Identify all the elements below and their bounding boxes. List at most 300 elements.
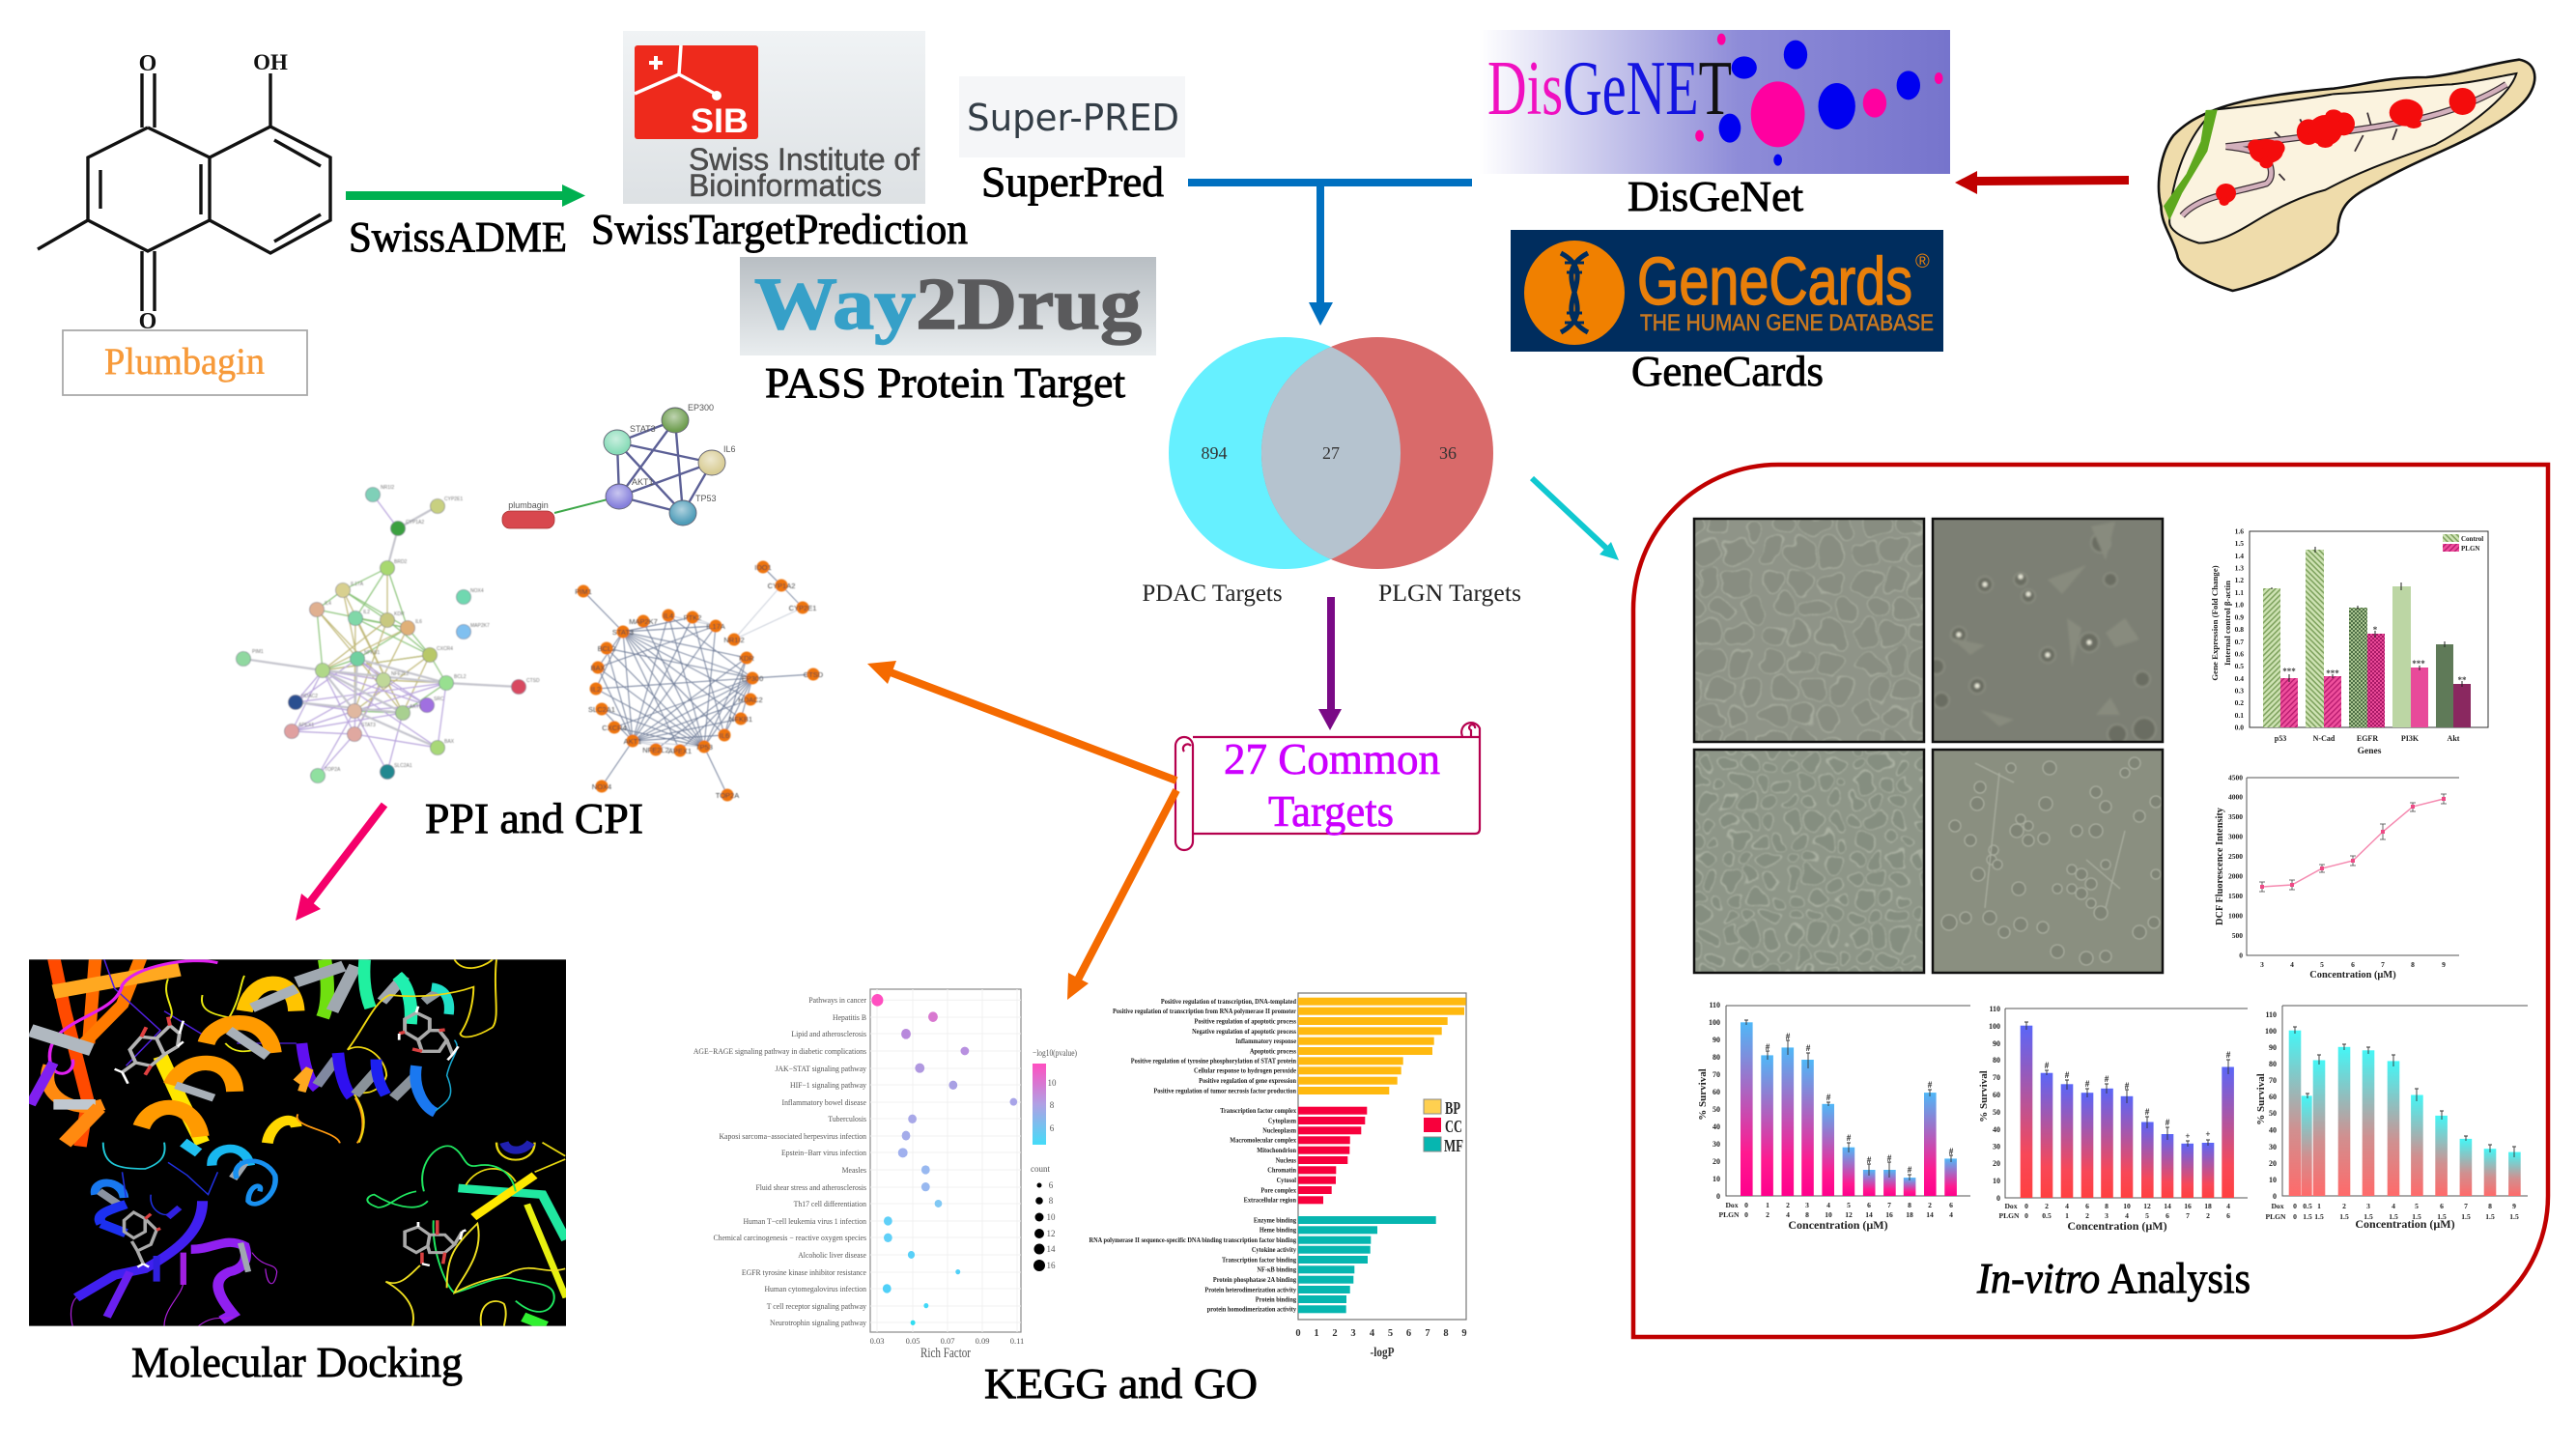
chart: survival 2: # [2105, 1074, 2109, 1084]
chart: survival 3: 50 [2269, 1109, 2277, 1118]
arrow: green to SwissTargetPrediction [346, 185, 585, 207]
chart: KEGG bubble plot: Th17 cell differentiation [794, 1200, 866, 1208]
network: protein-protein interaction (STRING): BCL2 [454, 674, 467, 680]
microscopy: cells control top-left [1692, 518, 1926, 744]
chart: gene expression bars: 0.9 [2235, 612, 2244, 622]
chart: GO enrichment bars: 0 [1295, 1328, 1301, 1339]
scroll: 27 common targets [1175, 723, 1480, 850]
chart: KEGG bubble plot: EGFR tyrosine kinase inhibitor resistance [742, 1268, 866, 1277]
chart: survival 1: 4 [1826, 1201, 1830, 1209]
arrow: orange to PPI [867, 661, 1176, 781]
chart: survival 2: + [2205, 1129, 2211, 1139]
chart: KEGG bubble plot: 8 [1050, 1100, 1055, 1110]
label: SwissTargetPrediction: SwissTargetPrediction [591, 206, 968, 253]
network: protein-protein interaction (STRING): KDR [394, 611, 405, 617]
network: protein-protein interaction (STRING): IL6 [415, 619, 422, 625]
chart: survival 3: 0.5 [2303, 1202, 2312, 1210]
chart: survival 2: 14 [2164, 1202, 2171, 1210]
network: circular PPI layout: NR1I2 [723, 636, 745, 644]
chart: GO enrichment bars: Chromatin [1267, 1167, 1296, 1175]
network: protein-protein interaction (STRING): MAP2K7 [470, 623, 490, 629]
chart: gene expression bars: ** [2457, 675, 2467, 685]
chart: survival 3: 4 [2392, 1202, 2395, 1210]
chart: survival 1: 8 [1908, 1201, 1911, 1209]
chart: KEGG bubble plot: Hepatitis B [833, 1013, 866, 1022]
chart: survival 3: 70 [2269, 1076, 2277, 1085]
chart: survival 3: 1.5 [2485, 1212, 2495, 1221]
scroll: 27 common targets: Targets [1268, 787, 1394, 836]
chart: survival 2: 110 [1989, 1005, 2000, 1013]
chart: KEGG bubble plot: JAK−STAT signaling pathway [775, 1065, 867, 1073]
network: circular PPI layout: IL6 [720, 731, 729, 740]
chart: survival 3: 1.5 [2461, 1212, 2471, 1221]
quadrant: docking pose 2 [297, 959, 496, 1143]
chart: survival 2 [1978, 1005, 2248, 1233]
chart: DCF fluorescence line: 2500 [2228, 852, 2243, 861]
chart: KEGG bubble plot: Rich Factor [920, 1346, 971, 1361]
chart: GO enrichment bars: Mitochondrion [1257, 1148, 1296, 1154]
chart: survival 1: 2 [1928, 1201, 1932, 1209]
chart: survival 1: 30 [1713, 1140, 1720, 1149]
chart: GO enrichment bars: Positive regulation of gene expression [1199, 1078, 1296, 1085]
chart: survival 3: 80 [2269, 1060, 2277, 1068]
chart: KEGG bubble plot: Neurotrophin signaling pathway [770, 1319, 867, 1327]
chart: survival 1: # [1908, 1165, 1912, 1175]
chart: gene expression bars: Akt [2448, 734, 2460, 743]
network: protein-protein interaction (STRING): CXCR4 [437, 646, 453, 652]
network: circular PPI layout: STAT3 [612, 628, 634, 637]
chart: survival 1: PLGN [1718, 1210, 1740, 1219]
chart: gene expression bars: *** [2412, 659, 2425, 668]
chart: gene expression bars: Internal control β-actin [2222, 581, 2232, 666]
chart: survival 2: % Survival [1978, 1070, 1990, 1122]
chart: survival 1: 14 [1926, 1210, 1934, 1219]
chart: KEGG bubble plot: Human cytomegalovirus infection [764, 1285, 866, 1293]
chart: DCF fluorescence line: 3 [2260, 960, 2264, 969]
chart: GO enrichment bars: Inflammatory response [1235, 1038, 1296, 1045]
network: protein-protein interaction (STRING): IL4 [325, 601, 331, 607]
chart: DCF fluorescence line [2215, 773, 2459, 980]
network: protein-protein interaction (STRING): BRD2 [394, 559, 408, 565]
chart: survival 3: 1.5 [2437, 1212, 2447, 1221]
chart: GO enrichment bars: Protein heterodimerization activity [1204, 1287, 1297, 1294]
panel: in-vitro analysis frame [1633, 465, 2548, 1337]
chart: survival 1: 4 [1949, 1210, 1953, 1219]
chart: GO enrichment bars: 2 [1332, 1328, 1338, 1339]
chart: DCF fluorescence line: 3500 [2228, 812, 2243, 821]
network: circular PPI layout: APEX1 [668, 747, 692, 755]
arrow: blue bracket to Venn [1188, 179, 1472, 326]
chart: survival 2: 4 [2226, 1202, 2230, 1210]
chart: KEGG bubble plot: 0.05 [906, 1336, 920, 1346]
chart: survival 3 [2255, 1006, 2528, 1231]
logo: GeneCards [1511, 230, 1943, 352]
network: circular PPI layout: NOX4 [592, 782, 611, 791]
chart: survival 2: 6 [2166, 1211, 2169, 1220]
chart: gene expression bars: *** [2326, 668, 2339, 678]
chart: gene expression bars [2210, 527, 2488, 756]
chart: gene expression bars: 0.0 [2235, 723, 2244, 732]
chart: survival 2: 6 [2226, 1211, 2230, 1220]
chart: survival 3: 30 [2269, 1143, 2277, 1151]
chart: gene expression bars: PLGN [2461, 545, 2479, 553]
chart: survival 3: 110 [2265, 1010, 2277, 1019]
network: circular PPI layout: TOP2A [716, 791, 739, 800]
network: circular PPI layout: IL4 [664, 611, 673, 620]
chart: survival 1: 18 [1906, 1210, 1913, 1219]
chart: DCF fluorescence line: 1000 [2228, 912, 2243, 920]
chart: gene expression bars: Control [2461, 535, 2483, 543]
chart: survival 3: 1.5 [2412, 1212, 2421, 1221]
logo: DisGeNET: DisGeNET [1487, 46, 1732, 131]
ligand: pose 3 [125, 1212, 160, 1267]
logo: SwissTargetPrediction: Swiss Institute of [689, 142, 920, 177]
chart: GO enrichment bars: -logP [1370, 1346, 1395, 1360]
quadrant: docking pose 4 [367, 1143, 566, 1326]
chart: gene expression bars: PI3K [2401, 734, 2420, 743]
chart: survival 3: 60 [2269, 1093, 2277, 1101]
chart: survival 3: 1.5 [2303, 1212, 2312, 1221]
arrow: orange to KEGG and GO [1067, 790, 1176, 1000]
chart: survival 2: 4 [2125, 1211, 2129, 1220]
chart: survival 3: 5 [2415, 1202, 2419, 1210]
venn diagram: PDAC vs PLGN targets: 894 [1202, 443, 1227, 463]
chart: survival 2: 0 [1996, 1194, 2000, 1203]
venn diagram: PDAC vs PLGN targets: PLGN Targets [1378, 581, 1521, 607]
logo: Super-PRED: Super-PRED [967, 97, 1179, 139]
chart: GO enrichment bars: MF [1444, 1136, 1463, 1155]
chart: GO enrichment bars: Cytokine activity [1252, 1247, 1297, 1254]
network: protein-protein interaction (STRING): IL2 [363, 610, 370, 615]
label: SuperPred: SuperPred [981, 158, 1164, 206]
chart: survival 3: 0 [2273, 1192, 2277, 1201]
chart: KEGG bubble plot: Pathways in cancer [808, 996, 866, 1005]
chart: GO enrichment bars: RNA polymerase II sequence-specific DNA binding transcription factor binding [1090, 1237, 1297, 1244]
chart: survival 3: 8 [2488, 1202, 2492, 1210]
chart: GO enrichment bars: 5 [1388, 1328, 1393, 1339]
network: circular PPI layout: IL2 [591, 685, 601, 694]
chart: DCF fluorescence line: DCF Fluorescence Intensity [2215, 807, 2225, 925]
chart: gene expression bars: EGFR [2357, 734, 2378, 743]
chart: GO enrichment bars: 3 [1350, 1328, 1356, 1339]
chart: survival 1: # [1928, 1080, 1933, 1090]
chart: gene expression bars: 0.8 [2235, 625, 2244, 634]
label: GeneCards: GeneCards [1631, 348, 1824, 395]
ligand: pose 1 [115, 1017, 184, 1084]
chart: survival 1: 5 [1847, 1201, 1851, 1209]
chart: survival 1: 100 [1709, 1018, 1720, 1027]
chart: GO enrichment bars: NF-κB binding [1257, 1266, 1297, 1274]
chart: survival 1: 12 [1845, 1210, 1853, 1219]
chart: survival 2: 12 [2143, 1202, 2151, 1210]
chart: GO enrichment bars: Nucleus [1276, 1157, 1296, 1165]
chart: survival 2: 100 [1989, 1022, 2000, 1031]
chart: survival 1: 1 [1766, 1201, 1769, 1209]
chart: KEGG bubble plot: Kaposi sarcoma−associated herpesvirus infection [719, 1132, 866, 1141]
chart: survival 2: # [2085, 1079, 2090, 1089]
chart: GO enrichment bars: Macromolecular complex [1230, 1137, 1297, 1145]
chart: survival 2: Dox [2004, 1202, 2018, 1210]
quadrant: docking pose 3 [71, 1143, 277, 1326]
chart: survival 2: 10 [2123, 1202, 2131, 1210]
icon: pancreas with tumours [2159, 60, 2534, 291]
chart: gene expression bars: 0.5 [2235, 662, 2244, 670]
chart: GO enrichment bars: 8 [1443, 1328, 1449, 1339]
plumbagin chemical structure: O [139, 309, 156, 334]
label: PASS Protein Target: PASS Protein Target [765, 359, 1125, 407]
network: circular PPI layout: SLC2A1 [588, 705, 615, 714]
chart: survival 2: 3 [2105, 1211, 2109, 1220]
network: compound-protein interaction [502, 403, 736, 528]
logo: SwissTargetPrediction [623, 31, 925, 204]
chart: GO enrichment bars: Enzyme binding [1254, 1217, 1297, 1225]
chart: survival 2: 8 [2105, 1202, 2109, 1210]
chart: gene expression bars: 1.2 [2235, 576, 2244, 584]
chart: survival 3: 1.5 [2509, 1212, 2519, 1221]
chart: survival 1: 8 [1805, 1210, 1809, 1219]
chart: GO enrichment bars: 4 [1370, 1328, 1375, 1339]
venn diagram: PDAC vs PLGN targets: 36 [1439, 443, 1457, 463]
network: protein-protein interaction (STRING): BAX [444, 739, 455, 745]
chart: survival 2: 1 [2065, 1211, 2069, 1220]
chart: KEGG bubble plot: 0.07 [941, 1336, 954, 1346]
chart: KEGG bubble plot [694, 989, 1077, 1361]
arrow: red from pancreas [1955, 171, 2129, 194]
label: In-vitro Analysis: In-vitro Analysis [1976, 1255, 2250, 1302]
chart: survival 1: 110 [1709, 1001, 1720, 1009]
chart: gene expression bars: 0.6 [2235, 649, 2244, 659]
network: circular PPI layout: CTSD [804, 670, 824, 679]
chart: survival 3: 1.5 [2339, 1212, 2349, 1221]
chart: survival 1: 10 [1825, 1210, 1832, 1219]
chart: survival 1: 2 [1766, 1210, 1769, 1219]
chart: survival 1: # [1826, 1093, 1831, 1102]
chart: survival 1: # [1786, 1032, 1791, 1041]
chart: survival 2: 5 [2145, 1211, 2149, 1220]
chart: DCF fluorescence line: 2000 [2228, 871, 2243, 881]
chart: DCF fluorescence line: 5 [2320, 960, 2324, 969]
chart: GO enrichment bars: Positive regulation of transcription from RNA polymerase II promoter [1113, 1009, 1296, 1015]
chart: DCF fluorescence line: 8 [2411, 960, 2415, 969]
chart: DCF fluorescence line: 1500 [2228, 892, 2243, 900]
chart: survival 1: % Survival [1697, 1068, 1709, 1121]
chart: GO enrichment bars: 9 [1461, 1328, 1467, 1339]
venn diagram: PDAC vs PLGN targets [1142, 337, 1521, 607]
microscopy: cells treated top-right [1929, 519, 2163, 744]
arrow: purple to common targets [1318, 597, 1342, 730]
microscopy: cells control bottom-left [1692, 748, 1926, 974]
chart: survival 3: 7 [2464, 1202, 2468, 1210]
chart: gene expression bars: 1.6 [2235, 527, 2244, 535]
logo: Way2Drug: Way 2Drug [754, 264, 1142, 345]
chart: survival 2: 40 [1993, 1125, 2000, 1134]
chart: survival 2: # [2145, 1107, 2150, 1117]
chart: survival 2: 0 [2024, 1202, 2028, 1210]
chart: survival 3: 6 [2440, 1202, 2444, 1210]
chart: KEGG bubble plot: 12 [1047, 1229, 1055, 1238]
chart: GO enrichment bars: CC [1445, 1117, 1462, 1136]
chart: KEGG bubble plot: 0.03 [870, 1336, 884, 1346]
network: circular PPI layout: PIM1 [575, 587, 592, 596]
network: compound-protein interaction: AKT1 [632, 477, 654, 487]
chart: KEGG bubble plot: 6 [1049, 1180, 1054, 1190]
chart: survival 2: 2 [2206, 1211, 2210, 1220]
network: circular PPI layout: PTK2 [684, 613, 701, 622]
chart: survival 1: # [1806, 1043, 1811, 1053]
network: circular PPI layout: NFE2L2 [642, 746, 669, 754]
microscopy: cells treated bottom-right [1933, 750, 2163, 973]
chart: KEGG bubble plot: Alcoholic liver disease [798, 1251, 866, 1260]
chart: survival 2: 2 [2085, 1211, 2089, 1220]
chart: survival 1: 4 [1786, 1210, 1790, 1219]
network: circular PPI layout: MAP2K7 [629, 617, 658, 626]
chart: survival 2: # [2065, 1070, 2070, 1080]
chart: survival 3: 1 [2317, 1202, 2321, 1210]
chart: GO enrichment bars: Heme binding [1260, 1227, 1297, 1235]
chart: survival 3: 0 [2293, 1202, 2297, 1210]
chart: KEGG bubble plot: Tuberculosis [828, 1115, 866, 1123]
chart: survival 2: 0 [2024, 1211, 2028, 1220]
network: protein-protein interaction (STRING): PIM1 [252, 649, 264, 655]
chart: KEGG bubble plot: 8 [1049, 1196, 1054, 1206]
chart: DCF fluorescence line: 9 [2442, 960, 2446, 969]
chart: GO enrichment bars: BP [1445, 1098, 1460, 1118]
chart: GO enrichment bars: Pore complex [1260, 1187, 1297, 1195]
network: circular PPI layout: CYP1A2 [768, 582, 795, 590]
chart: survival 1: 0 [1716, 1192, 1720, 1201]
chart: GO enrichment bars: Protein binding [1256, 1296, 1297, 1304]
chart: KEGG bubble plot: Chemical carcinogenesis − reactive oxygen species [713, 1234, 866, 1242]
label: DisGeNet: DisGeNet [1628, 173, 1803, 220]
chart: GO enrichment bars: Positive regulation of transcription, DNA-templated [1161, 999, 1296, 1006]
chart: survival 1: 6 [1949, 1201, 1953, 1209]
chart: GO enrichment bars: 7 [1425, 1328, 1430, 1339]
network: circular PPI layout: HDAC2 [738, 696, 763, 704]
chart: gene expression bars: 0.1 [2235, 711, 2244, 720]
network: protein-protein interaction (STRING): SRC [434, 696, 444, 702]
chart: survival 1: 6 [1867, 1201, 1871, 1209]
chart: gene expression bars: 1.5 [2235, 539, 2244, 548]
chart: survival 1: 10 [1713, 1175, 1720, 1183]
chart: GO enrichment bars [1090, 993, 1467, 1360]
chart: survival 2: 7 [2186, 1211, 2190, 1220]
network: compound-protein interaction: STAT3 [630, 424, 656, 434]
network: circular PPI layout: EP300 [742, 674, 763, 683]
network: protein-protein interaction (STRING) [236, 485, 540, 782]
logo: GeneCards: THE HUMAN GENE DATABASE [1640, 310, 1934, 336]
chart: gene expression bars: Gene Expression (Fold Change) [2210, 565, 2220, 681]
chart: DCF fluorescence line: 500 [2232, 931, 2243, 940]
chart: survival 3: % Survival [2255, 1073, 2267, 1125]
chart: survival 1: # [1766, 1042, 1770, 1052]
label: PPI and CPI: PPI and CPI [425, 795, 643, 842]
chart: DCF fluorescence line: 4500 [2228, 773, 2243, 782]
logo: SwissTargetPrediction: Bioinformatics [689, 168, 882, 203]
chart: gene expression bars: Genes [2358, 747, 2382, 756]
chart: KEGG bubble plot: Human T−cell leukemia virus 1 infection [743, 1217, 866, 1226]
network: circular PPI layout: CXCR4 [602, 724, 627, 732]
chart: KEGG bubble plot: 14 [1047, 1244, 1056, 1254]
label: SwissADME: SwissADME [349, 213, 567, 261]
plumbagin label box: Plumbagin [104, 341, 265, 383]
network: circular PPI layout: IDO1 [754, 563, 772, 572]
chart: survival 1: 50 [1713, 1105, 1720, 1114]
network: protein-protein interaction (STRING): SLC2A1 [394, 763, 412, 769]
chart: survival 1: # [1847, 1133, 1852, 1143]
chart: KEGG bubble plot: 10 [1047, 1078, 1057, 1088]
network: protein-protein interaction (STRING): NOX4 [470, 588, 484, 594]
chart: survival 3: 9 [2512, 1202, 2516, 1210]
chart: survival 2: 50 [1993, 1108, 2000, 1117]
chart: survival 2: # [2045, 1061, 2050, 1070]
network: circular PPI layout: TP53 [695, 743, 713, 752]
plumbagin chemical structure: O [139, 51, 156, 76]
chart: survival 1: 70 [1713, 1070, 1720, 1079]
chart: KEGG bubble plot: 6 [1050, 1123, 1055, 1133]
network: protein-protein interaction (STRING): IL17A [351, 582, 364, 587]
logo: DisGeNET [1479, 30, 1950, 174]
chart: gene expression bars: 1.3 [2235, 564, 2244, 572]
network: compound-protein interaction: EP300 [688, 403, 714, 412]
chart: gene expression bars: 0.2 [2235, 698, 2244, 707]
chart: survival 2: 6 [2085, 1202, 2089, 1210]
chart: survival 2: 90 [1993, 1039, 2000, 1048]
chart: survival 3: 40 [2269, 1126, 2277, 1134]
chart: gene expression bars: 1.4 [2235, 552, 2244, 560]
chart: survival 2: # [2226, 1050, 2231, 1060]
arrow: teal to in-vitro panel [1532, 478, 1619, 560]
network: protein-protein interaction (STRING): STAT3 [361, 723, 376, 728]
chart: survival 1: 80 [1713, 1053, 1720, 1062]
network: protein-protein interaction (STRING): CYP2E1 [444, 497, 463, 502]
chart: survival 1: 90 [1713, 1036, 1720, 1044]
chart: survival 1: 3 [1805, 1201, 1809, 1209]
venn diagram: PDAC vs PLGN targets: PDAC Targets [1142, 581, 1283, 607]
network: protein-protein interaction (STRING): APEX1 [298, 723, 314, 728]
chart: gene expression bars: * [2373, 625, 2378, 635]
chart: survival 3: 0 [2293, 1212, 2297, 1221]
chart: survival 2: # [2166, 1118, 2170, 1127]
image: molecular docking [29, 956, 566, 1326]
network: protein-protein interaction (STRING): NFE2L2 [391, 671, 410, 677]
quadrant: docking pose 1 [31, 956, 362, 1147]
chart: KEGG bubble plot: T cell receptor signaling pathway [767, 1302, 867, 1311]
chart: DCF fluorescence line: 4000 [2228, 792, 2243, 802]
chart: GO enrichment bars: Protein phosphatase 2A binding [1213, 1277, 1297, 1284]
chart: gene expression bars: 1.0 [2235, 601, 2244, 609]
chart: GO enrichment bars: Apoptotic process [1250, 1048, 1296, 1056]
chart: GO enrichment bars: Positive regulation of apoptotic process [1195, 1018, 1296, 1026]
chart: survival 1: 7 [1887, 1201, 1891, 1209]
chart: KEGG bubble plot: −log10(pvalue) [1033, 1048, 1077, 1059]
network: circular PPI layout: BCL2 [598, 644, 615, 653]
chart: survival 1: 20 [1713, 1157, 1720, 1166]
chart: DCF fluorescence line: 0 [2239, 951, 2243, 960]
chart: gene expression bars: 1.1 [2235, 588, 2244, 597]
chart: gene expression bars: *** [2282, 667, 2296, 676]
chart: KEGG bubble plot: Epstein−Barr virus infection [781, 1149, 866, 1157]
chart: GO enrichment bars: Positive regulation of tumor necrosis factor production [1153, 1088, 1296, 1095]
chart: GO enrichment bars: Transcription factor binding [1222, 1257, 1297, 1264]
chart: DCF fluorescence line: 3000 [2228, 833, 2243, 840]
chart: survival 1: 14 [1865, 1210, 1873, 1219]
chart: survival 1: # [1867, 1155, 1872, 1165]
network: compound-protein interaction: plumbagin [508, 500, 549, 510]
arrow: pink to docking [296, 805, 384, 921]
plumbagin chemical structure: OH [253, 50, 288, 74]
chart: KEGG bubble plot: 0.11 [1010, 1336, 1024, 1346]
chart: GO enrichment bars: Negative regulation of apoptotic process [1192, 1029, 1296, 1036]
